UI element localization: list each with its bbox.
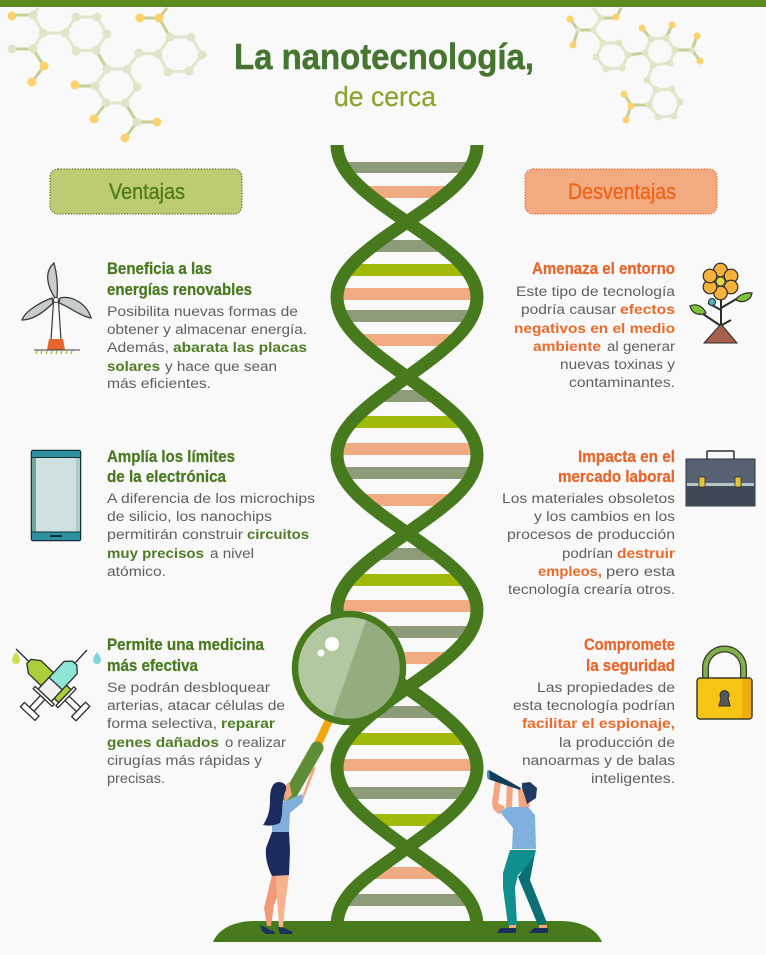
item: Beneficia a las energías renovables: Además, [107,340,169,356]
item: Compromete la seguridad: inteligentes. [591,771,675,787]
ground [213,921,602,942]
item: Impacta en el mercado laboral: destruir [617,546,676,562]
item: Permite una medicina más efectiva [107,636,286,787]
DNA double helix [337,145,477,926]
item: Compromete la seguridad: facilitar el espionaje, [522,716,675,732]
item: Permite una medicina más efectiva: Se podrán desbloquear [107,680,270,696]
item: Amenaza el entorno: podría causar [521,302,616,318]
heading pill: Ventajas [50,169,242,214]
item: Compromete la seguridad [513,636,675,787]
molecule decoration: left [8,8,206,142]
item: Compromete la seguridad: Compromete [584,636,675,654]
magnifying glass [289,614,403,797]
item: Impacta en el mercado laboral: procesos de producción [507,527,675,543]
item: Permite una medicina más efectiva: genes dañados [107,735,219,751]
item: Permite una medicina más efectiva: cirugías más rápidas y [107,753,263,769]
item: Beneficia a las energías renovables: obtener y almacenar energía. [107,322,307,338]
item: Impacta en el mercado laboral: y los cambios en los [534,509,675,525]
item: Impacta en el mercado laboral [502,448,676,598]
icon: syringes [7,640,101,723]
item: Amplía los límites de la electrónica: muy precisos [107,546,204,562]
item: Amplía los límites de la electrónica [107,448,315,580]
item: Compromete la seguridad: la seguridad [586,657,675,675]
item: Permite una medicina más efectiva: forma selectiva, [107,716,217,732]
item: Permite una medicina más efectiva: reparar [221,716,276,732]
item: Compromete la seguridad: Las propiedades de [537,680,675,696]
item: Beneficia a las energías renovables: más eficientes. [107,376,211,392]
item: Amplía los límites de la electrónica: atómico. [107,564,166,580]
item: Compromete la seguridad: nanoarmas y de balas [522,753,675,769]
title [234,36,534,112]
item: Compromete la seguridad: esta tecnología podrían [513,698,675,714]
item: Impacta en el mercado laboral: Los materiales obsoletos [502,491,675,507]
item: Amenaza el entorno: negativos en el medio [514,321,675,337]
item: Amplía los límites de la electrónica: a nivel [210,546,254,562]
icon: wind turbine [22,263,91,354]
icon: briefcase [686,451,755,506]
icon: tablet phone [32,450,80,540]
item: Permite una medicina más efectiva: precisas. [107,771,165,787]
item: Amplía los límites de la electrónica: de la electrónica [107,468,227,486]
top bar [0,0,766,7]
item: Amenaza el entorno [514,260,676,391]
item: Permite una medicina más efectiva: arterias, atacar células de [107,698,285,714]
item: Impacta en el mercado laboral: Impacta en el [578,448,675,466]
item: Impacta en el mercado laboral: pero esta [606,564,675,580]
heading pill: Desventajas: Desventajas [568,179,676,204]
item: Amplía los límites de la electrónica: de silicio, los nanochips [107,509,272,525]
title: de cerca [334,81,436,112]
item: Beneficia a las energías renovables: solares [107,359,160,375]
item: Beneficia a las energías renovables [107,260,307,392]
item: Impacta en el mercado laboral: tecnología crearía otros. [508,582,675,598]
heading pill: Desventajas [525,169,717,214]
item: Beneficia a las energías renovables: energías renovables [107,281,252,299]
item: Permite una medicina más efectiva: más efectiva [107,657,199,675]
item: Permite una medicina más efectiva: o realizar [225,735,286,751]
item: Compromete la seguridad: la producción de [559,735,675,751]
molecule decoration: right [566,8,704,124]
man with telescope [487,770,548,933]
item: Beneficia a las energías renovables: y hace que sean [165,359,277,375]
item: Amenaza el entorno: al generar [607,339,675,355]
item: Amplía los límites de la electrónica: A diferencia de los microchips [107,491,315,507]
woman holding the magnifying glass [260,766,316,934]
item: Permite una medicina más efectiva: Permite una medicina [107,636,265,654]
item: Amenaza el entorno: Amenaza el entorno [532,260,675,278]
item: Amenaza el entorno: contaminantes. [569,375,675,391]
item: Amenaza el entorno: ambiente [533,339,601,355]
heading pill: Ventajas: Ventajas [109,179,185,204]
item: Amenaza el entorno: nuevas toxinas y [560,357,676,373]
item: Beneficia a las energías renovables: Beneficia a las [107,260,212,278]
item: Impacta en el mercado laboral: empleos, [538,564,602,580]
title: La nanotecnología, [234,36,534,77]
item: Impacta en el mercado laboral: mercado laboral [558,468,675,486]
icon: flower [690,263,752,343]
item: Amplía los límites de la electrónica: circuitos [247,527,309,543]
item: Beneficia a las energías renovables: Posibilita nuevas formas de [107,304,298,320]
item: Amenaza el entorno: Este tipo de tecnología [516,284,675,300]
item: Amplía los límites de la electrónica: permitirán construir [107,527,243,543]
item: Amplía los límites de la electrónica: Amplía los límites [107,448,235,466]
icon: padlock [697,649,752,719]
item: Beneficia a las energías renovables: abarata las placas [173,340,307,356]
item: Amenaza el entorno: efectos [620,302,675,318]
item: Impacta en el mercado laboral: podrían [562,546,613,562]
